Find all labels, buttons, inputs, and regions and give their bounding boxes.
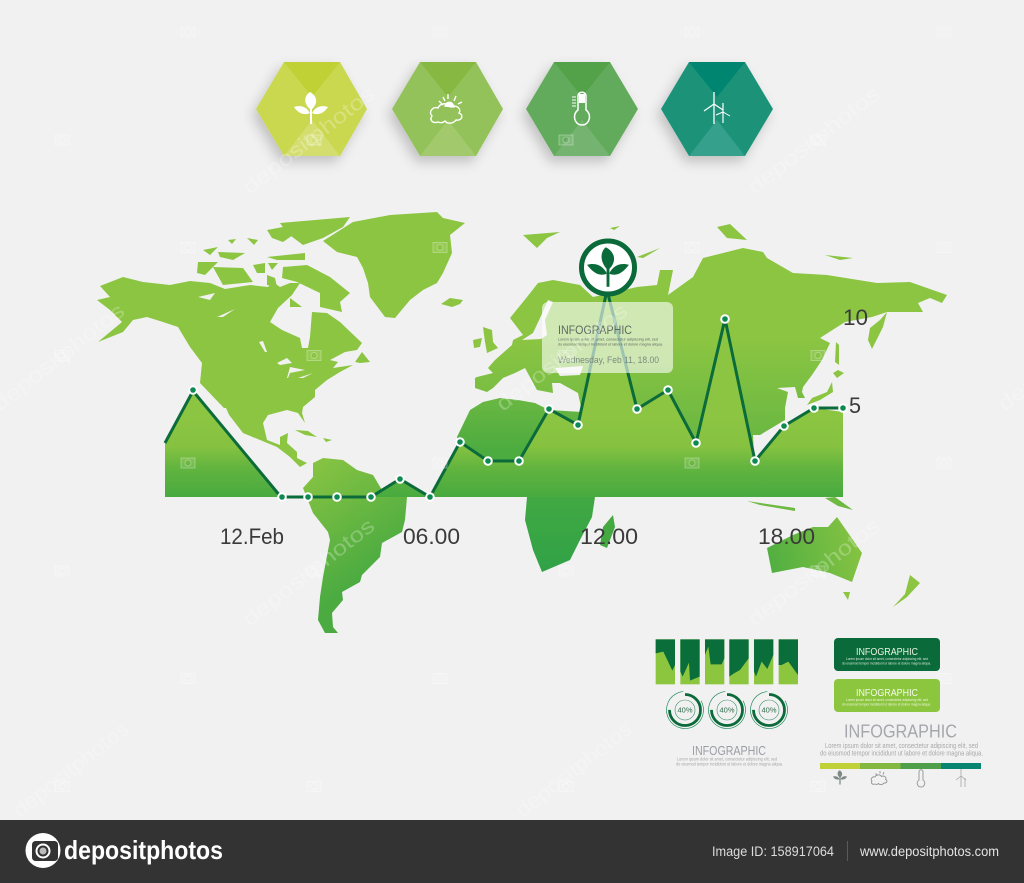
axis labels: 5 <box>849 393 861 418</box>
chart data points <box>189 315 847 501</box>
legend icon: cloud <box>871 771 887 785</box>
map: Canadian Arctic islands <box>197 217 350 312</box>
legend icon: plant <box>833 770 847 785</box>
light label box: INFOGRAPHIC <box>856 687 918 699</box>
large caption: Lorem ipsum dolor sit amet, consectetur adipiscing elit, sed <box>825 743 978 750</box>
hexagon 2: cloud and sun <box>392 62 503 156</box>
map: Australia <box>767 517 862 582</box>
watermarks: depositphotos <box>239 82 379 199</box>
map: Tasmania and New Zealand <box>843 575 920 607</box>
small caption <box>676 743 783 766</box>
watermarks: depositphotos <box>744 514 884 631</box>
map: Caribbean islands <box>295 430 332 442</box>
map pin with leaf icon <box>582 241 634 294</box>
map: Kamchatka <box>868 312 887 349</box>
small caption: Lorem ipsum dolor sit amet, consectetur adipiscing elit, sed <box>677 756 777 762</box>
website url: www.depositphotos.com <box>859 844 999 859</box>
world map <box>97 212 947 633</box>
footer bar <box>0 820 1024 883</box>
map: Sakhalin and Japan <box>807 342 844 405</box>
dark label box <box>834 638 940 671</box>
image id: Image ID: 158917064 <box>712 844 834 859</box>
map: Newfoundland <box>355 352 370 363</box>
map: Iceland <box>441 298 463 307</box>
map: Europe north islands <box>473 224 853 353</box>
colour legend strip <box>820 763 981 769</box>
chart fill <box>165 290 843 497</box>
hexagon 3: thermometer <box>526 62 638 156</box>
light label box: Lorem ipsum dolor sit amet, consectetur adipiscing elit, sed <box>846 698 928 702</box>
chart line <box>165 290 843 497</box>
tooltip card: Wednesday, Feb 11, 18.00 <box>558 355 659 366</box>
tooltip card <box>542 302 673 373</box>
axis labels: 06.00 <box>403 524 460 549</box>
dark label box: do eiusmod tempor incididunt ut labore et dolore magna aliqua. <box>842 662 931 666</box>
large caption: do eiusmod tempor incididunt ut labore et dolore magna aliqua. <box>820 750 983 758</box>
map: Madagascar <box>600 515 615 548</box>
light label box: do eiusmod tempor incididunt ut labore et dolore magna aliqua. <box>842 702 931 706</box>
axis labels: 10 <box>843 305 868 330</box>
footer divider <box>847 841 848 861</box>
axis labels: 12.00 <box>580 524 638 549</box>
legend icon: thermometer <box>917 770 925 787</box>
watermarks: depositphotos <box>9 718 133 822</box>
large caption: INFOGRAPHIC <box>844 722 957 742</box>
gauge 3: 40% <box>761 706 777 715</box>
tooltip card: Lorem ipsum dolor sit amet, consectetur adipiscing elit, sed <box>558 336 658 342</box>
donut gauges <box>660 685 794 735</box>
map: Indonesia and New Guinea <box>747 497 853 511</box>
axis labels: 18.00 <box>758 524 815 549</box>
tooltip card: INFOGRAPHIC <box>558 325 632 337</box>
axis labels <box>220 305 868 549</box>
watermarks: depositphotos <box>239 514 379 631</box>
dark label box: Lorem ipsum dolor sit amet, consectetur adipiscing elit, sed <box>846 657 928 661</box>
watermarks: depositphotos <box>492 299 632 416</box>
logo camera icon <box>26 833 60 868</box>
dark label box: INFOGRAPHIC <box>856 646 918 658</box>
small caption: do eiusmod tempor incididunt ut labore et dolore magna aliqua. <box>676 762 783 766</box>
map: Eurasia <box>475 248 947 497</box>
map: Baltic and Black Sea <box>522 300 583 376</box>
map: lakes and Baja gulf <box>198 293 313 427</box>
depositphotos logo <box>26 833 223 868</box>
hexagon 1: plant <box>256 62 367 156</box>
watermarks: depositphotos <box>744 82 884 199</box>
depositphotos logo: depositphotos <box>64 835 223 865</box>
map: Greenland <box>323 212 465 318</box>
small bar charts <box>656 639 798 684</box>
light label box <box>834 679 940 712</box>
tooltip card: do eiusmod tempor incididunt ut labore et dolore magna aliqua. <box>558 342 663 346</box>
small caption: INFOGRAPHIC <box>692 743 766 758</box>
axis labels: 12.Feb <box>220 524 284 549</box>
legend icon: turbine <box>956 769 966 787</box>
map: North America <box>97 277 362 467</box>
hexagon 4: wind turbines <box>661 62 773 156</box>
gauge 1: 40% <box>677 706 693 715</box>
map: South America <box>303 458 407 633</box>
gauge 2: 40% <box>719 706 735 715</box>
large caption <box>820 722 983 758</box>
legend icons <box>833 769 966 787</box>
map: Africa <box>457 398 620 572</box>
watermarks: depositphotos <box>512 718 636 822</box>
